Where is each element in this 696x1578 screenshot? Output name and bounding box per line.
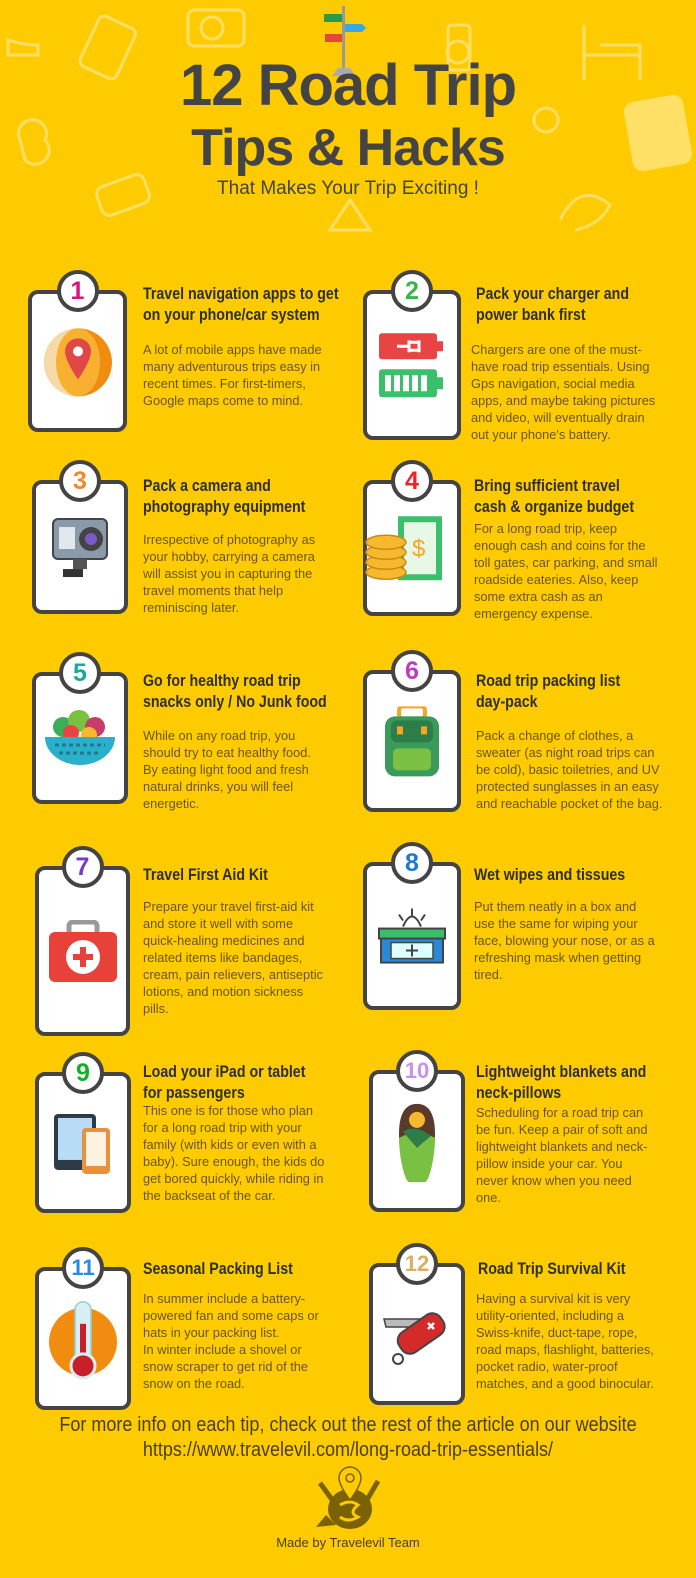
icon: charger battery [379,333,443,398]
text 4: roadside eateries. Also, keep [474,572,638,587]
text 11: snow on the road. [143,1376,245,1391]
text 7: cream, pain relievers, antiseptic [143,967,323,982]
text 4 [474,521,658,621]
text 11: hats in your packing list. [143,1325,280,1340]
title 5 [143,672,327,711]
text 5: By eating light food and fresh [143,762,309,777]
text 7: Prepare your travel first-aid kit [143,899,314,914]
made by: Made by Travelevil Team [276,1535,420,1550]
card 10: 10 [405,1058,429,1083]
card 7: 7 [76,853,89,881]
text 6 [476,728,662,811]
icon: first aid kit [49,920,117,982]
text 7: quick-healing medicines and [143,933,304,948]
icon: action camera [52,518,108,578]
title 4: Bring sufficient travel [474,477,620,495]
footer text: For more info on each tip, check out the rest of the article on our website [59,1414,637,1436]
logo [316,1466,380,1529]
title 6: Road trip packing list [476,672,620,690]
text 9: family (with kids or even with a [143,1137,317,1152]
text 7: related items like bandages, [143,950,302,965]
title 1 [143,285,339,324]
title 6: day-pack [476,693,538,711]
text 3: your hobby, carrying a camera [143,549,315,564]
title: Tips & Hacks [191,119,505,177]
title 6 [476,672,620,711]
text 2 [471,342,655,442]
icon: swiss knife [383,1312,446,1365]
text 12: utility-oriented, including a [476,1308,624,1323]
card 6 [363,670,461,812]
title 4: cash & organize budget [474,498,634,516]
title 10: Lightweight blankets and [476,1063,646,1081]
text 5: energetic. [143,796,199,811]
title 9: for passengers [143,1084,245,1102]
title 3: photography equipment [143,498,305,516]
text 2: apps, and maybe taking pictures [471,393,655,408]
title 2 [476,285,629,324]
text 12 [476,1291,654,1391]
text 4: enough cash and coins for the [474,538,645,553]
text 4: For a long road trip, keep [474,521,617,536]
text 9: the backseat of the car. [143,1188,275,1203]
title 2: power bank first [476,306,586,324]
text 6: Pack a change of clothes, a [476,728,633,743]
card 9 [35,1072,131,1213]
icon: cash coins: $ [412,535,425,562]
text 10: never know when you need [476,1173,632,1188]
card 10 [369,1070,465,1212]
text 12: matches, and a good binocular. [476,1376,654,1391]
text 10 [476,1105,647,1205]
card 3 [32,480,128,614]
text 10: one. [476,1190,501,1205]
text 2: Gps navigation, social media [471,376,635,391]
text 4: some extra cash as an [474,589,603,604]
icon: map pin [44,328,112,396]
background decorative icons [6,8,642,232]
text 2: have road trip essentials. Using [471,359,650,374]
card 11: 11 [71,1255,95,1280]
title 7: Travel First Aid Kit [143,866,268,884]
card 12 [369,1263,465,1405]
footer text [59,1414,637,1461]
text 8: face, blowing your nose, or as a [474,933,655,948]
card 5 [32,672,128,804]
text 4: emergency expense. [474,606,593,621]
card 2 [363,290,461,440]
title [180,53,516,177]
title 2: Pack your charger and [476,285,629,303]
text 3: travel moments that help [143,583,283,598]
text 11: In winter include a shovel or [143,1342,302,1357]
title 12: Road Trip Survival Kit [478,1260,625,1278]
text 9 [143,1103,324,1203]
card 1: 1 [71,277,84,305]
text 3: reminiscing later. [143,600,239,615]
text 1: recent times. For first-timers, [143,376,306,391]
text 5: natural drinks, you will feel [143,779,293,794]
footer text: https://www.travelevil.com/long-road-trip-essentials/ [143,1439,553,1461]
text 11: snow scraper to get rid of the [143,1359,308,1374]
card 8: 8 [405,849,419,877]
title 3: Pack a camera and [143,477,271,495]
title 8: Wet wipes and tissues [474,866,625,884]
text 2: Chargers are one of the must- [471,342,642,357]
text 12: pocket radio, water-proof [476,1359,618,1374]
text 5: should try to eat healthy food. [143,745,311,760]
text 8: Put them neatly in a box and [474,899,636,914]
text 9: This one is for those who plan [143,1103,313,1118]
text 1 [143,342,322,408]
title 9: Load your iPad or tablet [143,1063,305,1081]
text 1: Google maps come to mind. [143,393,303,408]
text 2: and video, will eventually drain [471,410,645,425]
text 6: be cold), basic toiletries, and UV [476,762,660,777]
text 7: pills. [143,1001,169,1016]
card 8 [363,862,461,1010]
text 1: many adventurous trips easy in [143,359,320,374]
card 7 [35,866,130,1036]
text 10: be fun. Keep a pair of soft and [476,1122,647,1137]
text 6: protected sunglasses in an easy [476,779,659,794]
text 12: road maps, flashlight, batteries, [476,1342,654,1357]
card 4: 4 [405,467,419,495]
text 3 [143,532,315,615]
icon: thermometer [49,1301,117,1380]
title: 12 Road Trip [180,53,516,118]
text 10: lightweight blankets and neck- [476,1139,647,1154]
text 5: While on any road trip, you [143,728,295,743]
icon: tissue box [378,908,446,964]
title 9 [143,1063,306,1102]
text 8 [474,899,655,982]
card 5: 5 [73,659,87,687]
text 9: for a long road trip with your [143,1120,302,1135]
text 12: Swiss-knife, duct-tape, rope, [476,1325,637,1340]
text 11: In summer include a battery- [143,1291,305,1306]
text 6: sweater (as night road trips can [476,745,655,760]
icon: tablet and phone [54,1114,110,1174]
text 8: refreshing mask when getting [474,950,641,965]
card 6: 6 [405,657,419,685]
title 10 [476,1063,646,1102]
title 1: on your phone/car system [143,306,320,324]
card 2: 2 [405,277,419,305]
card 11 [35,1267,131,1410]
title 4 [474,477,634,516]
text 3: will assist you in capturing the [143,566,312,581]
text 9: baby). Sure enough, the kids do [143,1154,324,1169]
title 3 [143,477,306,516]
text 10: Scheduling for a road trip can [476,1105,643,1120]
title 5: Go for healthy road trip [143,672,301,690]
text 12: Having a survival kit is very [476,1291,630,1306]
icon: backpack [385,706,439,776]
title 10: neck-pillows [476,1084,561,1102]
text 11: powered fan and some caps or [143,1308,319,1323]
text 1: A lot of mobile apps have made [143,342,322,357]
text 8: tired. [474,967,502,982]
text 7: and store it well with some [143,916,293,931]
card 12: 12 [405,1251,429,1276]
icon: signpost [324,6,366,76]
text 2: out your phone's battery. [471,427,611,442]
text 6: and reachable pocket of the bag. [476,796,662,811]
icon: sleeping bag [399,1104,435,1182]
text 5 [143,728,311,811]
title 1: Travel navigation apps to get [143,285,339,303]
text 8: use the same for wiping your [474,916,638,931]
title 11: Seasonal Packing List [143,1260,293,1278]
card 3: 3 [73,467,87,495]
text 4: toll gates, car parking, and small [474,555,658,570]
text 3: Irrespective of photography as [143,532,315,547]
text 7 [143,899,323,1016]
text 10: pillow inside your car. You [476,1156,623,1171]
card 1 [28,290,127,432]
card 9: 9 [76,1059,90,1087]
title 5: snacks only / No Junk food [143,693,327,711]
text 11 [143,1291,319,1391]
icon: salad bowl [45,710,115,765]
text 7: lotions, and motion sickness [143,984,303,999]
text 9: get bored quickly, while riding in [143,1171,323,1186]
card 4 [363,480,461,616]
icon: cash coins [365,516,442,580]
subtitle: That Makes Your Trip Exciting ! [217,178,479,199]
